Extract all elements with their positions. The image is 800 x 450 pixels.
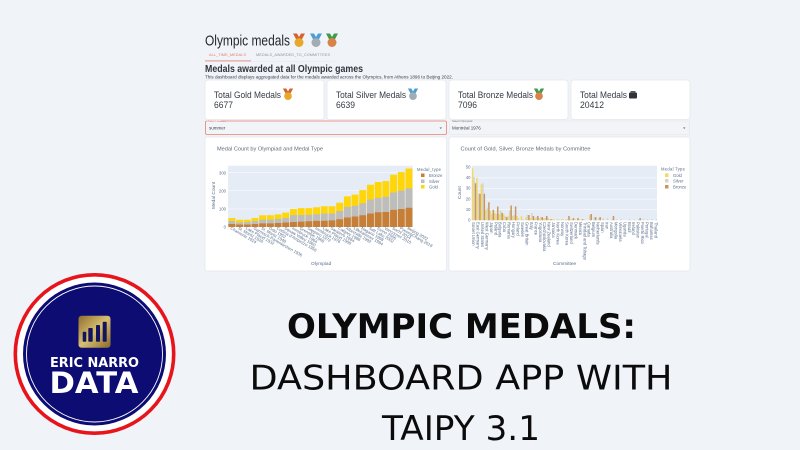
card: total medals: 20412 [580,100,604,111]
x axis labels: United States [480,222,485,247]
card: total silver medals: 6639 [336,100,355,111]
legend: Gold [673,173,683,178]
y axis labels: 20 [466,196,471,201]
x axis labels: Puerto Rico [640,222,645,245]
x axis labels: Iran [604,222,610,230]
x axis labels: Squaw Valley 1960 [283,226,317,248]
x axis labels: Great Britain [524,222,529,246]
x axis labels: Nagano 1998 [360,226,385,243]
x axis labels: Netherlands [596,222,601,245]
headline: DASHBOARD APP WITH [250,358,672,398]
card: total gold medals [205,80,324,120]
legend: Gold [429,184,439,190]
tabs: ALL_TIME_MEDALS [209,53,246,57]
x axis labels: Belgium [591,222,596,238]
x axis labels: Sochi 2014 [391,226,412,241]
dropdown: olympiad: Select Olympiad [452,119,473,123]
headline: TAIPY 3.1 [381,409,540,449]
dropdown: olympiad: Montréal 1976 [452,126,481,130]
x axis labels: New Zealand [547,222,552,247]
dropdown: season [206,119,446,134]
x axis labels: Canada [587,222,592,237]
icon: medal box [629,91,637,98]
x axis labels: East Germany [475,222,480,250]
y axis labels: 0 [468,218,471,222]
card: total gold medals: 6677 [214,100,233,111]
axis titles: Count [457,186,463,199]
x axis labels: Cortina d'Ampezzo 1956 [276,226,318,253]
axis titles [211,181,332,267]
icon: bronze medal [326,34,338,47]
x axis labels: Lake Placid 1980 [322,226,353,246]
x axis labels: Bulgaria [498,222,503,238]
x axis labels: Lillehammer 1994 [353,226,385,247]
headline [250,307,672,449]
icon: gold medal [293,34,305,47]
x axis labels: Brazil [627,222,632,233]
x axis labels: Venezuela [618,222,623,242]
x axis labels: Jamaica [551,222,556,238]
x axis labels: Cuba [502,222,507,233]
x axis labels: South Korea [564,222,569,246]
x axis labels: Finland [516,222,520,236]
x axis labels: Uganda [622,222,627,237]
x axis labels [230,226,434,258]
grouped bar chart [457,164,687,267]
y axis labels: 30 [466,186,471,191]
headline: OLYMPIC MEDALS: [287,307,636,347]
x axis labels: Bahamas [649,222,654,240]
x axis labels: Innsbruck 1976 [314,226,342,245]
x axis labels: St. Moritz 1948 [260,226,288,244]
card: total silver medals: Total Silver Medals [336,90,406,101]
x axis labels: PyeongChang 2018 [399,226,434,249]
x axis labels: Japan [489,222,494,234]
card: total bronze medals: Total Bronze Medals [458,90,533,101]
x axis labels: Garmisch-Partenkirchen 1936 [253,226,304,258]
dropdown: season: Select season [208,119,226,123]
x axis labels: Thailand [653,222,658,239]
y axis labels: 100 [219,206,227,212]
axis titles [457,186,577,267]
x axis labels: Sapporo 1972 [306,226,332,243]
card: total bronze medals: 7096 [458,100,477,111]
panel: medals by committee [449,137,690,271]
x axis labels: Spain [600,222,605,233]
x axis labels: Denmark [573,222,578,240]
axis titles: Olympiad [311,261,332,267]
legend: Medal_type [417,167,442,172]
x axis labels: Norway [560,222,565,237]
legend: Bronze [429,173,443,178]
card: total medals [571,80,690,120]
x axis labels: Australia [609,222,614,239]
x axis labels: North Korea [556,222,561,245]
icon: gold medal small [283,88,293,100]
x axis labels: Calgary 1988 [337,226,362,243]
x axis labels: Sweden [520,222,525,238]
y axis labels [466,164,471,222]
x axis labels [471,222,658,261]
legend [417,167,443,190]
tabs [205,53,335,61]
y axis labels: 40 [466,175,471,180]
stacked bar chart [211,166,443,267]
x axis labels: Torino 2006 [376,226,398,241]
icon: bronze medal small [534,88,544,100]
dashboard screenshot [205,34,690,271]
y axis labels [219,170,227,230]
x axis labels: Switzerland [569,222,574,244]
dropdown: season: summer [209,126,226,130]
card: total silver medals [327,80,446,120]
panel: medal count by olympiad [205,137,446,271]
card: total medals: Total Medals [580,90,627,101]
x axis labels: Ireland [631,222,636,235]
x axis labels: Trinidad and Tobago [582,222,587,261]
legend: Silver [429,179,440,184]
axis titles: Medal Count [211,181,217,209]
y axis labels: 10 [466,207,471,212]
axis titles: Committee [553,261,577,267]
x axis labels: West Germany [484,222,489,251]
x axis labels: Sarajevo 1984 [330,226,356,244]
icon: silver medal small [408,88,418,100]
x axis labels: Vancouver 2010 [384,226,413,245]
x axis labels: Beijing 2022 [407,226,430,242]
dashboard title: Olympic medals [205,34,290,50]
x axis labels: Portugal [645,222,650,238]
x axis labels: Innsbruck 1964 [291,226,319,245]
card: total gold medals: Total Gold Medals [214,90,281,101]
logo: Eric Narro Data: DATA [50,366,139,400]
x axis labels: Grenoble 1968 [299,226,326,244]
legend: Medal Type [661,166,686,172]
x axis labels: Yugoslavia [538,222,543,243]
x axis labels: Lake Placid 1932 [245,226,276,246]
x axis labels: Mexico [578,222,583,236]
x axis labels: Albertville 1992 [345,226,373,245]
x axis labels: Czechoslovakia [542,222,547,252]
y axis labels: 50 [466,164,471,170]
x axis labels: Italy [529,222,534,231]
chart title: Medal Count by Olympiad and Medal Type [217,146,323,152]
icon: gold bar chart badge [78,316,110,348]
x axis labels: Romania [507,222,512,239]
x axis labels: Soviet Union [471,222,476,246]
description: This dashboard displays aggregated data for the medals awarded across the Olympics, from Athens 1896 to Beijing 2022. [205,74,453,80]
section heading: Medals awarded at all Olympic games [205,63,363,75]
chart title: Count of Gold, Silver, Bronze Medals by Committee [460,146,590,152]
logo: Eric Narro Data [15,275,174,433]
y axis labels: 0 [224,224,227,230]
dropdown: olympiad [450,119,690,134]
legend [661,166,687,190]
y axis labels: 300 [219,170,227,176]
x axis labels: Chamonix 1924 [230,226,258,245]
x axis labels: Pakistan [636,222,641,239]
x axis labels: Hungary [511,222,516,239]
x axis labels: Salt Lake 2002 [368,226,395,244]
x axis labels: Poland [493,222,498,236]
x axis labels: Mongolia [613,222,618,240]
tabs: MEDALS_AWARDED_TO_COMMITTEES [256,53,330,57]
legend: Bronze [673,184,687,190]
legend: Silver [673,178,684,184]
x axis labels: St. Moritz 1928 [237,226,265,244]
logo: Eric Narro Data: ERIC NARRO [50,355,139,371]
icon: silver medal [310,34,322,47]
x axis labels: France [533,222,538,236]
x axis labels: Oslo 1952 [268,226,288,240]
card: total bronze medals [449,80,568,120]
y axis labels: 200 [219,188,227,194]
